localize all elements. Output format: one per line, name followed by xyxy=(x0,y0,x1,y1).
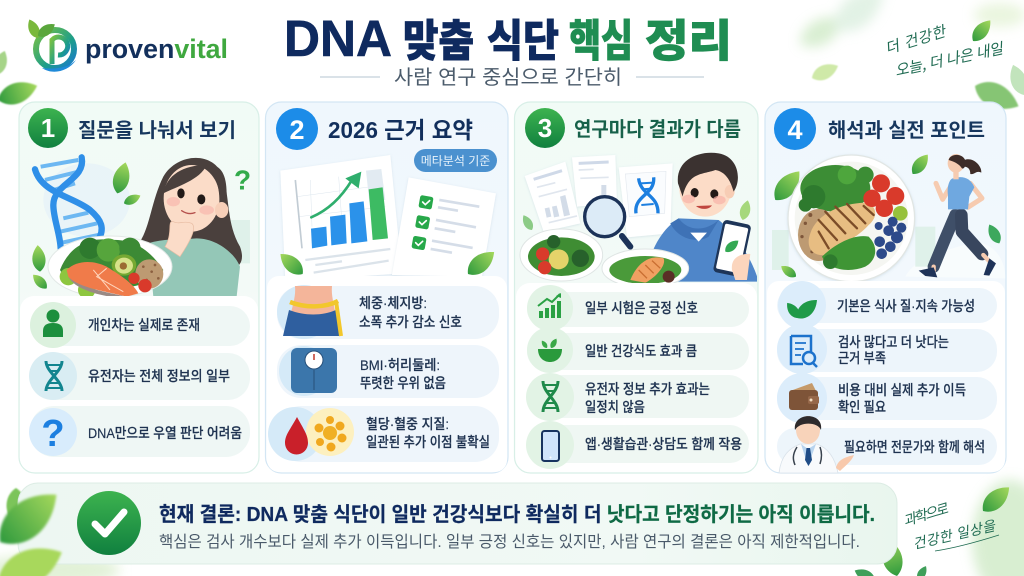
item: 앱·생활습관: 앱·생활습관·상담도 함께 작용 xyxy=(585,436,742,452)
item: 유전자 xyxy=(29,352,250,400)
runner xyxy=(934,183,989,271)
heading 3: 연구마다 결과가 다름 xyxy=(574,118,741,141)
handwritten note: top right xyxy=(882,16,1006,81)
wordmark: provenvital xyxy=(85,34,228,64)
white list backing xyxy=(267,276,507,472)
number badge 3: 3 xyxy=(538,113,552,143)
item: 기본은 식사 질: 기본은 식사 질·지속 가능성 xyxy=(837,298,975,314)
item: 체중·체지방 xyxy=(277,285,499,339)
title: DNA xyxy=(284,10,392,67)
illustration: papers, magnifier, bowls and man with phone xyxy=(520,153,759,288)
subtitle: 사람 연구 중심으로 간단히 xyxy=(394,66,622,89)
title: 핵심 xyxy=(569,17,633,66)
item: 비용 대비: 비용 대비 실제 추가 이득 xyxy=(838,382,966,398)
number badge 2 xyxy=(276,108,318,150)
panel 3: 연구마다 결과가 다름 xyxy=(514,102,759,473)
white list backing xyxy=(516,283,757,472)
illustration: DNA, woman and salmon bowl: ? xyxy=(234,164,251,195)
panel 2: 2026 근거 요약 xyxy=(266,102,508,473)
tag: 메타분석 기준: 메타분석 기준 xyxy=(421,154,490,168)
number badge 1: 1 xyxy=(41,113,55,143)
item: 유전자 정보 추가 xyxy=(526,373,749,421)
item: 일부 시험 xyxy=(527,285,749,331)
item: 일부 시험: 일부 시험은 긍정 신호 xyxy=(585,300,698,316)
item: 앱·생활습관 xyxy=(526,421,749,469)
conclusion body: 핵심은 검사 개수보다 실제 추가 이득입니다. 일부 긍정 신호는 있지만, 사람 연구의 결론은 아직 제한적입니다. xyxy=(159,533,860,551)
item: 기본은 식사 질 xyxy=(777,281,997,329)
item: DNA만으로 xyxy=(29,406,250,457)
item: 검사 많다고 xyxy=(777,324,997,374)
heading 4: 해석과 실전 포인트 xyxy=(828,119,985,142)
item: 유전자 정보 추가: 일정치 않음 xyxy=(585,399,645,415)
number badge 4 xyxy=(774,108,816,150)
item: 체중·체지방: 소폭 추가 감소 신호 xyxy=(359,314,462,330)
item: DNA만으로: DNA만으로 우열 판단 어려움 xyxy=(88,425,242,441)
icon: doctor xyxy=(779,416,854,473)
item: DNA만으로: ? xyxy=(41,413,65,455)
item: 전문가와 함께 xyxy=(777,416,997,473)
illustration: DNA, woman and salmon bowl xyxy=(30,157,251,299)
item: 혈당·혈중 지질: 일관된 추가 이점 불확실 xyxy=(366,434,490,450)
icon: check circle xyxy=(77,491,141,555)
title: 맞춤 xyxy=(403,17,474,66)
item: 혈당·혈중 지질: 혈당·혈중 지질: xyxy=(366,416,449,432)
title: 식단 xyxy=(487,17,559,66)
handwritten note: top right: 오늘, 더 나은 내일 xyxy=(893,37,1006,81)
handwritten note: bottom right xyxy=(901,481,1015,554)
item: 유전자 정보 추가: 유전자 정보 추가 효과는 xyxy=(585,381,710,397)
item: 일반 건강식: 일반 건강식도 효과 큼 xyxy=(585,343,697,359)
item: 일반 건강식 xyxy=(527,327,749,373)
tag: 메타분석 기준 xyxy=(414,149,497,172)
item: 개인차 xyxy=(30,302,250,348)
logo: provenvital xyxy=(25,17,228,72)
handwritten note: bottom right: 건강한 일상을 xyxy=(911,515,998,554)
icon: logo mark xyxy=(25,17,76,72)
panel 1: 질문을 나눠서 보기 xyxy=(19,102,259,473)
number badge 4: 4 xyxy=(787,115,803,145)
foreground leaves: bottom left xyxy=(0,481,69,576)
item: BMI·허리둘레 xyxy=(277,345,499,398)
item: 유전자: 유전자는 전체 정보의 일부 xyxy=(88,368,230,384)
item: BMI·허리둘레: 뚜렷한 우위 없음 xyxy=(360,375,446,391)
item: 체중·체지방: 체중·체지방: xyxy=(359,295,427,311)
conclusion heading: 현재 결론: DNA 맞춤 식단이 일반 건강식보다 확실히 더 낫다고 단정하기는 아직 이릅니다. xyxy=(159,503,875,526)
item: BMI·허리둘레: BMI·허리둘레: xyxy=(360,357,440,373)
white list backing xyxy=(767,281,1005,472)
item: 혈당·혈중 지질 xyxy=(268,406,499,462)
item: 비용 대비: 확인 필요 xyxy=(838,399,886,415)
illustration: chart document and checklist xyxy=(276,155,500,282)
item: 검사 많다고: 근거 부족 xyxy=(838,350,886,366)
conclusion banner xyxy=(18,483,897,564)
item: 검사 많다고: 검사 많다고 더 낫다는 xyxy=(838,334,949,350)
number badge 2: 2 xyxy=(289,115,305,145)
handwritten note: bottom right: 과학으로 xyxy=(901,498,952,531)
item: 전문가와 함께: 필요하면 전문가와 함께 해석 xyxy=(844,439,985,455)
item: 개인차: 개인차는 실제로 존재 xyxy=(88,317,200,333)
panel 4: 해석과 실전 포인트 xyxy=(765,102,1006,473)
heading 2: 2026 근거 요약 xyxy=(328,117,473,143)
title: 정리 xyxy=(645,17,732,66)
illustration: chicken bowl and runner xyxy=(768,151,1005,282)
number badge 1 xyxy=(28,108,68,148)
title xyxy=(284,10,732,67)
heading 1: 질문을 나눠서 보기 xyxy=(78,119,236,142)
handwritten note: top right: 더 건강한 xyxy=(882,20,950,59)
white list backing xyxy=(20,296,258,472)
number badge 3 xyxy=(525,108,565,148)
item: 비용 대비 xyxy=(777,373,997,423)
